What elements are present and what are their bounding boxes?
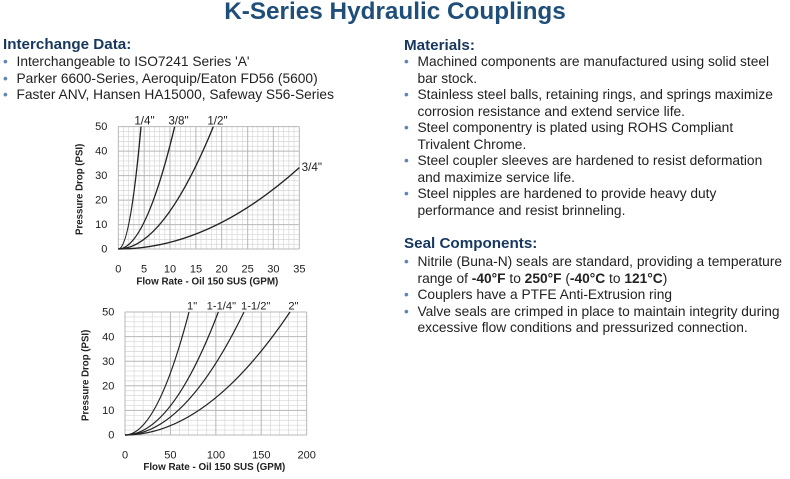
- curve labels: 3/4": [302, 161, 322, 174]
- x axis labels: [115, 263, 305, 275]
- curve labels: 1/2": [207, 114, 228, 127]
- curve labels: 1": [187, 301, 197, 313]
- chart: pressure drop, small couplings: [74, 114, 322, 288]
- text block: interchange data list: Interchangeable to ISO7241 Series 'A': [16, 54, 250, 69]
- curve labels: 1-1/4": [207, 301, 236, 313]
- text block: interchange data list: [4, 54, 334, 102]
- text block: materials list: Stainless steel balls, retaining rings, and springs maximize: [418, 87, 773, 102]
- text block: interchange data list: Faster ANV, Hansen HA15000, Safeway S56-Series: [16, 87, 334, 102]
- y axis title: Pressure Drop (PSI): [81, 330, 92, 421]
- text block: materials list: bar stock.: [418, 70, 477, 86]
- x axis labels: 30: [267, 263, 279, 275]
- x axis labels: 15: [190, 263, 202, 275]
- text block: materials list: corrosion resistance and extend service life.: [418, 104, 685, 118]
- text block: materials list: Machined components are manufactured using solid steel: [418, 54, 769, 69]
- y axis labels: 10: [102, 405, 114, 417]
- y axis labels: 0: [108, 430, 114, 442]
- text block: interchange data list: Parker 6600-Series, Aeroquip/Eaton FD56 (5600): [16, 70, 318, 86]
- text block: materials list: [404, 54, 773, 218]
- x axis labels: 100: [207, 449, 225, 461]
- text block: materials list: and maximize service life.: [418, 170, 575, 184]
- text block: seal components list: Couplers have a PTFE Anti-Extrusion ring: [418, 287, 672, 302]
- text block: seal components list: range of -40°F to 250°F (-40°C to 121°C): [418, 270, 667, 286]
- x axis labels: 50: [164, 449, 176, 461]
- text block: materials list: Trivalent Chrome.: [418, 136, 526, 152]
- y axis labels: 50: [95, 121, 107, 133]
- x axis labels: 25: [242, 263, 254, 275]
- y axis labels: 30: [102, 356, 114, 368]
- text block: materials list: performance and resist brinneling.: [418, 202, 625, 218]
- curve labels: 1-1/2": [241, 301, 270, 313]
- y axis labels: 20: [95, 195, 107, 207]
- curve labels: 3/8": [168, 114, 189, 127]
- text block: seal components list: [404, 254, 782, 335]
- text block: seal components list: excessive flow conditions and pressurized connection.: [418, 320, 748, 335]
- y axis labels: 10: [95, 219, 107, 231]
- curve labels: [134, 114, 322, 174]
- x axis title: Flow Rate - Oil 150 SUS (GPM): [136, 277, 278, 288]
- x axis labels: 5: [141, 263, 147, 275]
- curves: [118, 127, 299, 249]
- x axis labels: 150: [252, 449, 271, 461]
- text block: materials list: Steel nipples are hardened to provide heavy duty: [418, 186, 716, 201]
- x axis title: Flow Rate - Oil 150 SUS (GPM): [143, 462, 285, 473]
- heading: seal components: Seal Components:: [404, 235, 537, 252]
- x axis labels: 0: [122, 449, 128, 461]
- x axis labels: 0: [115, 263, 121, 275]
- heading: materials: Materials:: [404, 37, 475, 54]
- text block: seal components list: Valve seals are crimped in place to maintain integrity during: [418, 304, 780, 318]
- heading: interchange data: Interchange Data:: [3, 36, 131, 53]
- x axis labels: 10: [164, 263, 176, 275]
- x axis labels: 20: [216, 263, 228, 275]
- x axis labels: [122, 449, 316, 461]
- y axis labels: [95, 121, 107, 256]
- chart: pressure drop, large couplings: [81, 301, 316, 473]
- curve labels: 1/4": [134, 114, 155, 127]
- x axis labels: 200: [297, 449, 316, 461]
- y axis title: Pressure Drop (PSI): [74, 144, 85, 235]
- curves: [125, 312, 290, 435]
- y axis labels: 20: [102, 381, 114, 393]
- text block: seal components list: Nitrile (Buna-N) seals are standard, providing a temperature: [418, 254, 782, 269]
- text block: materials list: Steel componentry is plated using ROHS Compliant: [418, 120, 733, 135]
- y axis labels: 0: [101, 244, 107, 256]
- y axis labels: 30: [95, 170, 107, 182]
- x axis labels: 35: [293, 263, 305, 275]
- y axis labels: 40: [95, 146, 107, 158]
- text block: materials list: Steel coupler sleeves are hardened to resist deformation: [418, 153, 762, 168]
- y axis labels: 50: [102, 307, 114, 319]
- y axis labels: [102, 307, 114, 442]
- curve labels: 2": [288, 301, 299, 313]
- y axis labels: 40: [102, 331, 114, 343]
- curve labels: [187, 301, 299, 313]
